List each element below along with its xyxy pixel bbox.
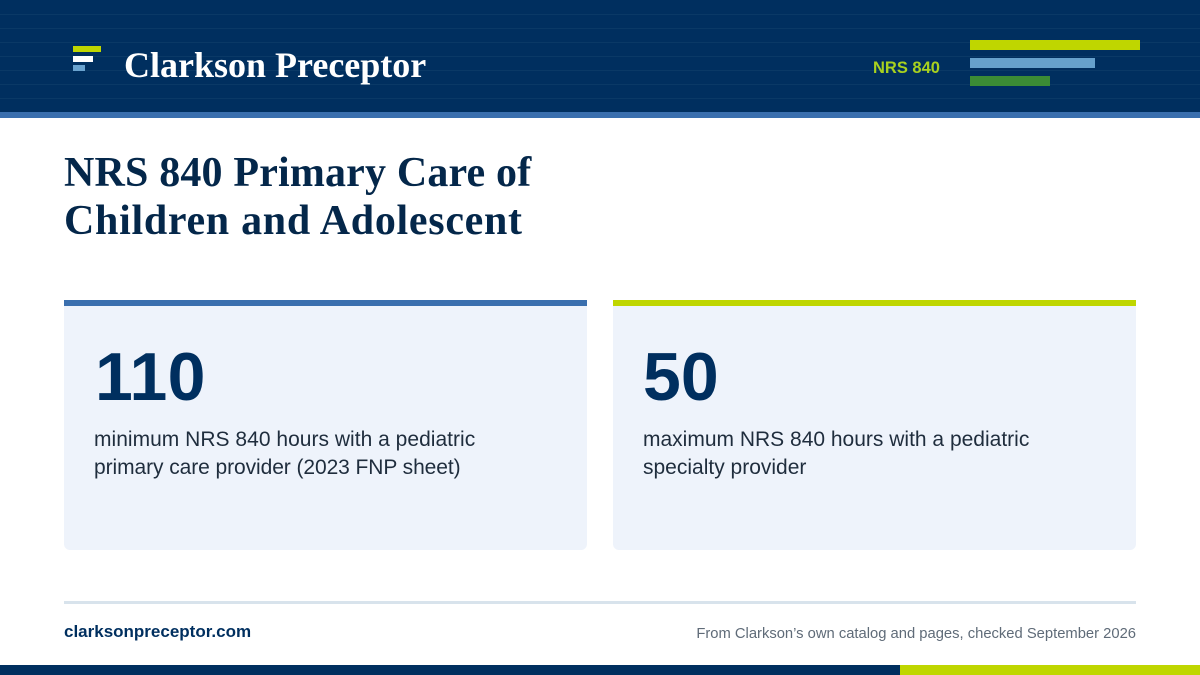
description: maximum hours: specialty provider	[643, 456, 806, 479]
stat: 50: 50	[643, 339, 719, 415]
title: Children and Adolescent	[64, 198, 523, 244]
panel: minimum hours	[64, 300, 587, 550]
logo icon	[73, 46, 101, 71]
description: maximum hours	[643, 428, 1029, 479]
panel: maximum hours	[613, 300, 1136, 550]
description: minimum hours: minimum NRS 840 hours with a pediatric	[94, 428, 475, 451]
website: clarksonpreceptor.com	[64, 622, 251, 641]
stat: 110: 110	[95, 339, 206, 415]
title: NRS 840 Primary Care of	[64, 150, 531, 196]
brand name: Clarkson Preceptor	[124, 45, 426, 85]
description: minimum hours: primary care provider (2023 FNP sheet)	[94, 456, 461, 479]
description: maximum hours: maximum NRS 840 hours with a pediatric	[643, 428, 1029, 451]
header bars	[970, 40, 1140, 86]
source note: From Clarkson’s own catalog and pages, checked September 2026	[696, 626, 1136, 642]
bottom bar	[0, 665, 1200, 675]
header band	[0, 0, 1200, 118]
description: minimum hours	[94, 428, 475, 479]
footer rule	[64, 601, 1136, 604]
course label: NRS 840	[873, 59, 940, 77]
title	[64, 150, 532, 244]
